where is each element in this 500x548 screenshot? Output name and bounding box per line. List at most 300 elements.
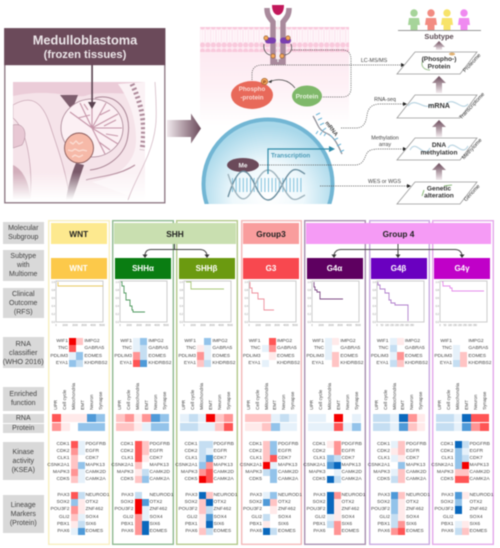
lineage heatmap: G4 gamma: POU3F2 bbox=[434, 507, 454, 512]
RNA classifier: G4 alpha: GABRA5 bbox=[340, 346, 360, 351]
survival chart: G4 gamma: 350 bbox=[473, 324, 478, 327]
lineage heatmap: G4 gamma: SOX2 bbox=[440, 500, 454, 505]
nucleus bbox=[200, 116, 336, 205]
row label: kinase activity bbox=[2, 442, 44, 480]
kinase heatmap: G4 beta: EGFR bbox=[406, 449, 420, 454]
kinase heatmap: G3: PDGFRB bbox=[278, 442, 298, 447]
row label: enriched function: Enriched bbox=[9, 391, 37, 398]
subtype header: G3 bbox=[243, 258, 299, 278]
survival chart: WNT: 2000 bbox=[72, 324, 78, 327]
row label: kinase activity: Kinase bbox=[13, 448, 34, 456]
RNA classifier: WNT: IMPG2 bbox=[84, 339, 100, 344]
kinase heatmap: G4 alpha: CAMK2D bbox=[342, 470, 362, 475]
RNA classifier: WNT: PDLIM3 bbox=[50, 354, 68, 359]
kinase heatmap: SHH beta: MAPK3 bbox=[181, 470, 198, 475]
lineage heatmap: G4 beta bbox=[370, 491, 430, 536]
survival chart: SHH beta: 0.0 bbox=[180, 321, 184, 324]
subtype header: SHH alpha: SHHα bbox=[132, 264, 154, 273]
survival chart: G4 gamma: 50 bbox=[444, 324, 447, 327]
lineage heatmap: G3: SIX6 bbox=[278, 522, 289, 527]
kinase heatmap: SHH beta: CAMK2A bbox=[214, 477, 234, 482]
survival chart: G4 gamma: 0 bbox=[439, 324, 441, 327]
row label: clinical outcome bbox=[2, 288, 44, 318]
dotted connectors bbox=[252, 50, 408, 186]
survival chart: WNT: 1.0 bbox=[52, 281, 56, 284]
survival chart: G4 beta: 350 bbox=[410, 324, 414, 327]
RNA classifier: G4 beta: TNC bbox=[378, 346, 388, 351]
RNA classifier: G3: EYA1 bbox=[248, 361, 260, 366]
top workflow illustration bbox=[3, 4, 486, 205]
lineage heatmap: G4 alpha: EOMES bbox=[342, 529, 359, 534]
panel title: (frozen tissues) bbox=[44, 49, 127, 61]
survival chart: SHH alpha: 0.2 bbox=[116, 313, 120, 316]
lineage heatmap: SHH alpha: ZNF462 bbox=[150, 507, 167, 512]
lineage heatmap: SHH alpha: SIX6 bbox=[150, 522, 160, 527]
kinase heatmap: SHH beta: CAMK2D bbox=[214, 470, 234, 475]
subtype header: SHH alpha bbox=[115, 258, 171, 278]
RNA classifier: WNT: EOMES bbox=[84, 354, 102, 359]
kinase heatmap: G3: EGFR bbox=[278, 449, 292, 454]
survival chart: SHH beta: 0.2 bbox=[180, 313, 184, 316]
function labels: G4 alpha: Cell cycle bbox=[318, 390, 323, 410]
kinase heatmap: G4 beta: CDK2 bbox=[377, 449, 390, 454]
function labels: G3: Cell cycle bbox=[255, 390, 260, 410]
lineage heatmap: G4 beta: SOX4 bbox=[406, 515, 419, 520]
RNA classifier: G4 gamma: PDLIM3 bbox=[434, 354, 452, 359]
survival chart: G4 gamma: 1.0 bbox=[436, 281, 440, 284]
omics stack: methylation bbox=[420, 150, 458, 156]
kinase heatmap: G4 gamma: CDK1 bbox=[440, 442, 454, 447]
kinase heatmap: G4 alpha: CDK2 bbox=[312, 449, 326, 454]
kinase heatmap: G4 gamma: EGFR bbox=[470, 449, 483, 454]
function labels: SHH alpha bbox=[117, 382, 168, 410]
lineage heatmap: G4 beta: GLI2 bbox=[379, 515, 390, 520]
kinase heatmap: G4 beta bbox=[367, 440, 427, 484]
kinase heatmap: G4 beta: CLK1 bbox=[378, 456, 390, 461]
kinase heatmap: WNT: CDK1 bbox=[56, 442, 70, 447]
survival chart: G4 alpha bbox=[307, 280, 361, 327]
protein bbox=[292, 86, 322, 106]
lineage heatmap: WNT: OTX2 bbox=[86, 500, 98, 505]
row label: kinase activity: (KSEA) bbox=[12, 466, 35, 474]
lineage heatmap: G3: GLI2 bbox=[251, 515, 262, 520]
kinase heatmap: SHH alpha: CDK5 bbox=[120, 477, 134, 482]
function labels: G4 beta: UPR bbox=[374, 400, 379, 410]
lineage heatmap: G4 beta: POU3F2 bbox=[371, 507, 390, 512]
lineage heatmap: WNT: SOX2 bbox=[56, 500, 70, 505]
omics stack: DNA bbox=[432, 142, 446, 149]
lineage heatmap: G3: ZNF462 bbox=[278, 507, 296, 512]
omics stack: Proteome bbox=[462, 53, 482, 74]
lineage heatmap: G4 alpha: GLI2 bbox=[315, 515, 326, 520]
survival chart: G3: 3000 bbox=[274, 324, 280, 327]
lineage heatmap: G3: NEUROD1 bbox=[278, 493, 302, 498]
subtype header: WNT: WNT bbox=[69, 264, 88, 273]
survival chart: G4 beta: 0.0 bbox=[372, 321, 376, 324]
survival chart: G4 beta: 0 bbox=[376, 324, 378, 327]
kinase heatmap: G4 beta: CAMK2D bbox=[406, 470, 426, 475]
survival chart: G3: 0.8 bbox=[244, 289, 248, 292]
RNA classifier: WNT: WIF1 bbox=[56, 339, 68, 344]
RNA classifier: SHH beta: TNC bbox=[186, 346, 196, 351]
survival chart: SHH beta: 0.8 bbox=[180, 289, 184, 292]
panel: G4 alpha bbox=[304, 220, 366, 545]
survival chart: G4 alpha: 0.0 bbox=[308, 321, 312, 324]
RNA classifier: G4 alpha: TNC bbox=[314, 346, 324, 351]
survival chart: G4 gamma: 0.6 bbox=[436, 297, 440, 300]
function labels: G4 gamma: EMT bbox=[464, 400, 469, 410]
panel: SHH beta bbox=[176, 220, 238, 545]
panel: cell diagram bbox=[200, 5, 351, 125]
panel: WNT bbox=[48, 220, 110, 545]
lineage heatmap: G4 alpha: POU3F2 bbox=[306, 507, 326, 512]
survival chart: G3: 0.2 bbox=[244, 313, 248, 316]
RNA classifier: G4 beta: PDLIM3 bbox=[371, 354, 388, 359]
kinase heatmap: G4 alpha bbox=[302, 440, 362, 484]
kinase heatmap: WNT: CDK2 bbox=[56, 449, 70, 454]
lineage heatmap: G4 gamma: SOX4 bbox=[470, 515, 483, 520]
kinase heatmap: SHH alpha: CDK2 bbox=[120, 449, 134, 454]
enriched function heatmap: SHH beta bbox=[180, 413, 234, 432]
kinase heatmap: SHH beta: CSNK2A1 bbox=[175, 463, 198, 468]
kinase heatmap: G3: CAMK2D bbox=[278, 470, 298, 475]
omics stack: (Phospho-) bbox=[422, 56, 456, 63]
survival chart: SHH alpha: 0.8 bbox=[116, 289, 120, 292]
function labels: WNT: UPR bbox=[53, 400, 58, 410]
kinase heatmap: G3 bbox=[239, 440, 299, 484]
RNA classifier: WNT: KHDRBS2 bbox=[84, 361, 107, 366]
survival chart: G4 beta: 50 bbox=[380, 324, 383, 327]
function labels: SHH beta: Neuron bbox=[217, 394, 222, 410]
kinase heatmap: G4 gamma: PDGFRB bbox=[470, 442, 490, 447]
kinase heatmap: SHH alpha: CLK1 bbox=[121, 456, 134, 461]
kinase heatmap: SHH beta bbox=[174, 440, 234, 484]
lineage heatmap: WNT: GLI2 bbox=[59, 515, 70, 520]
RNA classifier: SHH beta bbox=[178, 337, 236, 368]
lineage heatmap: G3 bbox=[242, 491, 302, 536]
row label: molecular subgroup: Molecular bbox=[8, 225, 38, 232]
method labels: RNA-seq bbox=[374, 97, 396, 103]
function labels: G4 beta: Cell cycle bbox=[383, 390, 388, 410]
kinase heatmap: WNT: CSNK2A1 bbox=[47, 463, 70, 468]
survival chart: G4 alpha: 4000 bbox=[346, 324, 352, 327]
group header: WNT bbox=[50, 223, 107, 244]
function labels: SHH alpha: Mitochondria bbox=[135, 383, 140, 410]
row label: clinical outcome: Outcome bbox=[9, 300, 37, 306]
lineage heatmap: G3: PBX1 bbox=[249, 522, 262, 527]
lineage heatmap: SHH alpha: NEUROD1 bbox=[150, 493, 173, 498]
survival chart: SHH alpha: 5000 bbox=[163, 324, 169, 327]
lineage heatmap: SHH beta: EOMES bbox=[214, 529, 231, 534]
subtype header: G4 beta bbox=[370, 258, 426, 278]
group header: Group 4: Group 4 bbox=[383, 228, 414, 238]
kinase heatmap: WNT: EGFR bbox=[86, 449, 99, 454]
lineage heatmap: G4 alpha: SOX4 bbox=[342, 515, 355, 520]
row label: subtype with multiome: with bbox=[17, 262, 29, 269]
kinase heatmap: WNT: MAPK13 bbox=[86, 463, 105, 468]
omics stack: Transcriptome bbox=[458, 92, 486, 121]
mRNA strand: mRNA bbox=[323, 121, 339, 138]
protein: Protein bbox=[296, 94, 318, 100]
survival chart: G3: 0.4 bbox=[244, 305, 248, 308]
survival chart: WNT bbox=[51, 280, 105, 327]
method labels: array bbox=[379, 142, 391, 148]
kinase heatmap: SHH beta: PDGFRB bbox=[214, 442, 234, 447]
kinase heatmap: G4 alpha: CDK1 bbox=[312, 442, 326, 447]
lineage heatmap: G4 beta: PAX3 bbox=[378, 493, 390, 498]
lineage heatmap: G4 gamma: OTX2 bbox=[470, 500, 482, 505]
kinase heatmap: G4 alpha: CDK5 bbox=[312, 477, 326, 482]
RNA classifier: G4 beta: GABRA5 bbox=[405, 346, 425, 351]
panel title: Medulloblastoma bbox=[33, 32, 138, 48]
survival chart: SHH beta: 0.4 bbox=[180, 305, 184, 308]
function labels: G3: Neuron bbox=[281, 394, 286, 410]
function labels: SHH beta: Mitochondria bbox=[199, 383, 204, 410]
row label: molecular subgroup: Subgroup bbox=[8, 234, 38, 241]
RNA classifier: SHH beta: KHDRBS2 bbox=[212, 361, 235, 366]
methylation mark: Me bbox=[238, 162, 248, 170]
RNA classifier: G4 alpha: IMPG2 bbox=[340, 339, 356, 344]
survival chart: G4 beta: 200 bbox=[394, 324, 399, 327]
lineage heatmap: WNT: POU3F2 bbox=[50, 507, 70, 512]
RNA classifier: G4 beta: IMPG2 bbox=[405, 339, 420, 344]
lineage heatmap: SHH beta: POU3F2 bbox=[178, 507, 198, 512]
kinase heatmap: SHH alpha: CDK1 bbox=[120, 442, 134, 447]
phospho-protein: P bbox=[263, 79, 266, 84]
function labels: WNT bbox=[53, 382, 104, 410]
row label: RNA classifier bbox=[2, 337, 44, 368]
function labels: G3 bbox=[246, 382, 296, 410]
lineage heatmap: G4 gamma: ZNF462 bbox=[470, 507, 487, 512]
lineage heatmap: SHH beta: SIX6 bbox=[214, 522, 224, 527]
row label: clinical outcome: (RFS) bbox=[14, 308, 33, 316]
function labels: G4 beta: Synapse bbox=[418, 392, 423, 410]
tumor bbox=[64, 133, 94, 163]
kinase heatmap: SHH alpha: CAMK2A bbox=[150, 477, 170, 482]
function labels: G4 alpha: Synapse bbox=[354, 392, 359, 410]
RNA classifier: SHH alpha: KHDRBS2 bbox=[148, 361, 171, 366]
lineage heatmap: G4 gamma: PAX6 bbox=[441, 529, 454, 534]
function labels: SHH beta: EMT bbox=[208, 400, 213, 410]
lineage heatmap: G4 alpha: SOX2 bbox=[312, 500, 326, 505]
lineage heatmap: SHH alpha: SOX2 bbox=[120, 500, 134, 505]
function labels: SHH beta bbox=[181, 382, 232, 410]
kinase heatmap: G3: CDK7 bbox=[278, 456, 291, 461]
function labels: G4 gamma: Synapse bbox=[482, 392, 487, 410]
survival chart: G3: 2000 bbox=[265, 324, 271, 327]
survival chart: G4 gamma: 0.8 bbox=[436, 289, 440, 292]
lineage heatmap: G3: OTX2 bbox=[278, 500, 291, 505]
survival chart: G4 beta: 0.4 bbox=[372, 305, 376, 308]
RNA classifier: G3: IMPG2 bbox=[277, 339, 292, 344]
kinase heatmap: G4 beta: MAPK3 bbox=[373, 470, 390, 475]
RNA classifier: G4 alpha bbox=[306, 338, 364, 368]
kinase heatmap: SHH alpha: EGFR bbox=[150, 449, 163, 454]
lineage heatmap: SHH beta: PAX3 bbox=[185, 493, 198, 498]
survival chart: SHH alpha: 1.0 bbox=[116, 281, 120, 284]
RNA classifier: SHH alpha: PDLIM3 bbox=[114, 354, 132, 359]
survival chart: G4 alpha: 0.4 bbox=[308, 305, 312, 308]
survival chart: SHH beta bbox=[179, 280, 233, 327]
function labels: G4 alpha: Neuron bbox=[345, 394, 350, 410]
RNA classifier: G4 beta: KHDRBS2 bbox=[405, 361, 428, 366]
kinase heatmap: G4 gamma: CAMK2A bbox=[470, 477, 490, 482]
kinase heatmap: SHH alpha: MAPK3 bbox=[117, 470, 134, 475]
row label: RNA classifier: (WHO 2016) bbox=[3, 357, 44, 366]
RNA classifier: G4 beta: EYA1 bbox=[376, 361, 388, 366]
RNA classifier: SHH alpha: EYA1 bbox=[120, 361, 132, 366]
kinase heatmap: G4 gamma bbox=[432, 441, 490, 483]
panel: G4 gamma bbox=[432, 220, 494, 545]
lineage heatmap: G4 alpha: ZNF462 bbox=[342, 507, 359, 512]
survival chart: G3: 0 bbox=[248, 324, 250, 327]
subtype people bbox=[398, 9, 481, 31]
kinase heatmap: G4 beta: CDK5 bbox=[377, 477, 390, 482]
kinase heatmap: G3: CAMK2A bbox=[278, 477, 298, 482]
row label: enriched function bbox=[2, 387, 44, 411]
subtype header: G4 alpha: G4α bbox=[327, 264, 342, 273]
kinase heatmap: G3: MAPK13 bbox=[278, 463, 297, 468]
survival chart: SHH beta: 2000 bbox=[200, 324, 206, 327]
kinase heatmap: G4 alpha: PDGFRB bbox=[342, 442, 362, 447]
survival chart: SHH beta: 0.6 bbox=[180, 297, 184, 300]
kinase heatmap: WNT: CDK5 bbox=[56, 477, 70, 482]
function labels: SHH alpha: Cell cycle bbox=[126, 390, 131, 410]
enriched function heatmap: G3 bbox=[244, 414, 297, 432]
function labels: G4 gamma: Neuron bbox=[473, 394, 478, 410]
lineage heatmap: WNT: SIX6 bbox=[86, 522, 96, 527]
RNA classifier: G3: EOMES bbox=[277, 354, 295, 359]
kinase heatmap: SHH alpha: CDK7 bbox=[150, 456, 163, 461]
arrow: tissue to cell bbox=[167, 114, 201, 144]
survival chart: SHH alpha: 3000 bbox=[145, 324, 151, 327]
transcription arrow bbox=[268, 146, 335, 174]
kinase heatmap: SHH beta: CDK2 bbox=[184, 449, 198, 454]
function labels: SHH alpha: Synapse bbox=[162, 392, 167, 410]
survival chart: G4 alpha: 2000 bbox=[328, 324, 334, 327]
lineage heatmap: SHH beta: PBX1 bbox=[185, 522, 198, 527]
survival chart: G3: 4000 bbox=[283, 324, 289, 327]
survival chart: SHH beta: 3000 bbox=[209, 324, 215, 327]
RNA classifier: SHH alpha: EOMES bbox=[148, 354, 166, 359]
function labels: G4 alpha: Mitochondria bbox=[327, 383, 332, 410]
lineage heatmap: SHH beta: SOX2 bbox=[184, 500, 198, 505]
row label: kinase activity: activity bbox=[13, 458, 34, 464]
lineage heatmap: SHH alpha: GLI2 bbox=[123, 515, 134, 520]
survival chart: G4 beta: 250 bbox=[400, 324, 404, 327]
group header: Group 4 bbox=[306, 223, 491, 244]
RNA classifier: G3: KHDRBS2 bbox=[277, 361, 300, 366]
RNA classifier: G4 beta bbox=[370, 338, 428, 368]
row label: enriched function: function bbox=[11, 400, 36, 407]
omics stack: Genome bbox=[463, 184, 482, 203]
function labels: WNT: EMT bbox=[80, 400, 85, 410]
function labels: G4 alpha: EMT bbox=[336, 400, 341, 410]
function labels: WNT: Neuron bbox=[89, 394, 94, 410]
kinase heatmap: SHH alpha: CAMK2D bbox=[150, 470, 170, 475]
lineage heatmap: SHH alpha: SOX4 bbox=[150, 515, 163, 520]
RNA classifier: G4 gamma: KHDRBS2 bbox=[468, 361, 491, 366]
lineage heatmap: SHH beta: GLI2 bbox=[187, 515, 198, 520]
survival chart: SHH alpha: 0 bbox=[119, 324, 121, 327]
kinase heatmap: G4 beta: CDK1 bbox=[377, 442, 390, 447]
RNA classifier: SHH beta: GABRA5 bbox=[212, 346, 232, 351]
function labels: G3: UPR bbox=[246, 400, 251, 410]
RNA classifier: SHH alpha: TNC bbox=[122, 346, 132, 351]
survival chart: G4 beta: 0.6 bbox=[372, 297, 376, 300]
kinase heatmap: G4 alpha: EGFR bbox=[342, 449, 355, 454]
omics stack: mRNA bbox=[428, 101, 450, 110]
lineage heatmap: SHH beta: PAX6 bbox=[185, 529, 198, 534]
method labels: WES or WGS bbox=[368, 179, 401, 185]
row label: protein: Protein bbox=[12, 425, 34, 432]
enriched function heatmap: G4 alpha bbox=[308, 413, 362, 432]
function labels: WNT: Synapse bbox=[98, 392, 103, 410]
survival chart: G3: 0.6 bbox=[244, 297, 248, 300]
function labels: G4 beta: EMT bbox=[400, 400, 405, 410]
panel: G4 beta bbox=[368, 220, 430, 545]
row label: RNA classifier: classifier bbox=[9, 348, 37, 357]
RNA classifier: G4 gamma: EOMES bbox=[468, 354, 486, 359]
function labels: SHH alpha: Neuron bbox=[153, 394, 158, 410]
RNA classifier: SHH alpha: GABRA5 bbox=[148, 346, 168, 351]
survival chart: G4 gamma: 200 bbox=[458, 324, 463, 327]
lineage heatmap: SHH alpha: EOMES bbox=[150, 529, 167, 534]
survival chart: G4 alpha: 0.2 bbox=[308, 313, 312, 316]
survival chart: SHH alpha: 1000 bbox=[126, 324, 132, 327]
omics stack: alteration bbox=[424, 192, 454, 200]
row label: clinical outcome: Clinical bbox=[12, 290, 35, 298]
kinase heatmap: SHH beta: EGFR bbox=[214, 449, 227, 454]
RNA classifier: G4 alpha: PDLIM3 bbox=[306, 354, 324, 359]
RNA classifier: WNT: EYA1 bbox=[56, 361, 68, 366]
survival chart: G4 beta: 0.2 bbox=[372, 313, 376, 316]
RNA classifier: SHH alpha: IMPG2 bbox=[148, 339, 164, 344]
RNA classifier: G4 gamma bbox=[434, 338, 492, 368]
survival chart: SHH alpha bbox=[115, 280, 169, 327]
survival chart: G4 gamma bbox=[435, 280, 488, 327]
kinase heatmap: G4 alpha: MAPK3 bbox=[309, 470, 326, 475]
lineage heatmap: SHH alpha bbox=[114, 492, 174, 536]
phospho-protein bbox=[231, 78, 273, 109]
lineage heatmap: WNT: PAX6 bbox=[57, 529, 70, 534]
kinase heatmap: G4 gamma: MAPK13 bbox=[470, 463, 489, 468]
RNA classifier: G4 gamma: WIF1 bbox=[440, 339, 452, 344]
RNA classifier: SHH beta: WIF1 bbox=[184, 339, 196, 344]
function labels: SHH beta: UPR bbox=[181, 400, 186, 410]
survival chart: WNT: 0 bbox=[55, 324, 57, 327]
kinase heatmap: G4 gamma: CAMK2D bbox=[470, 470, 490, 475]
RNA classifier: G3: GABRA5 bbox=[277, 346, 297, 351]
kinase heatmap: WNT bbox=[46, 440, 106, 484]
group header: SHH bbox=[114, 223, 236, 244]
kinase heatmap: G4 alpha: CDK7 bbox=[342, 456, 355, 461]
lineage heatmap: G4 gamma: GLI2 bbox=[443, 515, 454, 520]
survival chart: G3: 0.0 bbox=[244, 321, 248, 324]
function labels: SHH beta: Synapse bbox=[226, 392, 231, 410]
kinase heatmap: G4 beta: PDGFRB bbox=[406, 442, 426, 447]
function labels: G4 alpha: UPR bbox=[309, 400, 314, 410]
group header: WNT: WNT bbox=[69, 228, 88, 238]
survival chart: SHH beta: 1.0 bbox=[180, 281, 184, 284]
survival chart: SHH alpha: 0.4 bbox=[116, 305, 120, 308]
function labels: G3: EMT bbox=[272, 400, 277, 410]
kinase heatmap: SHH alpha: PDGFRB bbox=[150, 442, 170, 447]
survival chart: G4 alpha: 0.8 bbox=[308, 289, 312, 292]
subtype header: WNT bbox=[50, 258, 106, 278]
RNA classifier: G4 beta: WIF1 bbox=[377, 339, 388, 344]
omics stack: Genetic bbox=[427, 186, 451, 192]
